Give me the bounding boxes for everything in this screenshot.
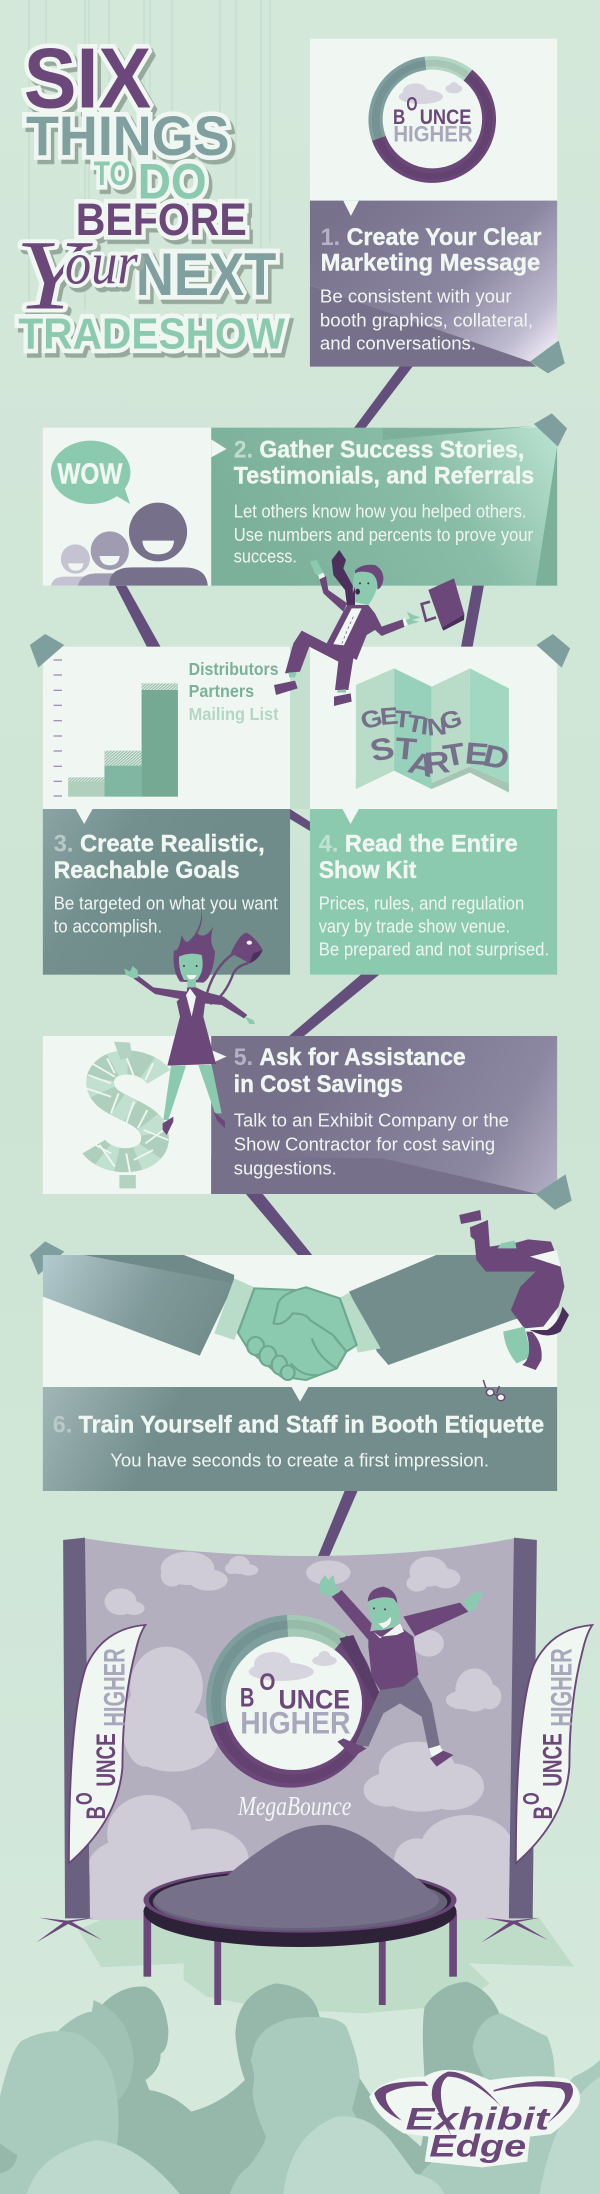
title: six things to do before your next tradeshow: DO <box>138 154 207 209</box>
heading: step 5 <box>234 1043 466 1098</box>
heading: step 1: Marketing Message <box>321 248 540 276</box>
icon: tape corner <box>530 341 565 373</box>
illustration: handshake <box>43 1255 557 1380</box>
feather flag right: HIGHER <box>545 1648 578 1727</box>
logo: bounce higher ring: O <box>406 94 417 115</box>
logo: Exhibit Edge: Exhibit <box>406 2101 551 2137</box>
text: step 1 body <box>320 287 533 354</box>
booth posts <box>63 1538 537 1918</box>
heading: step 5: in Cost Savings <box>234 1070 403 1098</box>
feather flag left <box>69 1625 145 1863</box>
icon: three smiling people <box>51 503 208 586</box>
icon: folded getting started map <box>356 668 513 793</box>
clouds <box>88 1552 513 1920</box>
trampoline <box>143 1825 457 2005</box>
heading: step 1 <box>321 223 541 276</box>
booth backdrop with clouds and logo <box>63 1538 592 1920</box>
chart: axis ticks <box>54 659 62 797</box>
text: step 2 body: Let others know how you helped others. <box>234 502 527 522</box>
title: six things to do before your next tradeshow: NEXT <box>136 240 276 308</box>
feather flag right: O <box>519 1792 544 1805</box>
icon: folded getting started map: GETTING <box>357 703 465 741</box>
icon: wow speech bubble <box>51 441 130 504</box>
icon: tape corner <box>536 1174 572 1210</box>
title: six things to do before your next tradeshow: TO <box>94 154 130 192</box>
heading: step 4 <box>319 829 518 884</box>
logo: Exhibit Edge: Edge <box>429 2129 526 2164</box>
title: six things to do before your next tradeshow <box>15 30 286 358</box>
text: step 1 body: Be consistent with your <box>320 287 512 307</box>
legend: distributors partners mailing list: Mailing List <box>189 704 279 725</box>
feather flag right: UNCE <box>538 1733 568 1787</box>
title: six things to do before your next tradeshow: SIX <box>24 30 151 126</box>
text: step 5 body: Talk to an Exhibit Company or the <box>234 1111 509 1131</box>
feather flag left: HIGHER <box>98 1648 131 1727</box>
panel: step 3 chart area <box>30 634 290 809</box>
logo: large bounce higher ring: UNCE <box>279 1685 350 1715</box>
text: step 2 body: success. <box>234 547 297 567</box>
icon: folded getting started map: STARTED <box>366 730 513 784</box>
text: step 5 body <box>234 1111 509 1179</box>
logo: bounce higher ring: HIGHER <box>393 123 473 147</box>
heading: step 2 <box>234 435 534 489</box>
legend: distributors partners mailing list: Partners <box>189 681 254 702</box>
chart: stacked bars <box>68 683 178 797</box>
text: step 3 body: Be targeted on what you want <box>54 894 278 914</box>
icon: shattered dollar sign <box>86 1042 168 1188</box>
heading: step 1: 1. Create Your Clear <box>321 223 541 251</box>
title: six things to do before your next tradeshow: Y <box>15 220 94 331</box>
title: six things to do before your next tradeshow: BEFORE <box>76 195 247 245</box>
text: step 4 body <box>319 894 549 960</box>
illustration: upside-down falling man and glasses <box>459 1210 569 1401</box>
text: step 1 body: and conversations. <box>320 334 476 354</box>
text: step 1 body: booth graphics, collateral, <box>320 311 533 331</box>
illustration: falling businesswoman <box>124 910 263 1135</box>
logo: Exhibit Edge <box>369 2070 580 2167</box>
trampoline, crowd and footer logo <box>0 1825 600 2194</box>
feather flag left: B <box>82 1806 112 1819</box>
panel: step 4 map area <box>310 634 570 809</box>
text: step 4 body: Be prepared and not surprised. <box>319 940 549 960</box>
title: six things to do before your next tradeshow: TRADESHOW <box>18 308 286 358</box>
booth bases <box>36 1918 548 1942</box>
logo: large bounce higher ring <box>206 1615 376 1788</box>
connector lines between steps <box>115 366 484 1557</box>
title: six things to do before your next tradeshow: our <box>65 229 138 296</box>
heading: step 3: Reachable Goals <box>54 856 240 884</box>
panel: step 2 testimonials <box>43 413 567 586</box>
icon: wow speech bubble: WOW <box>57 457 123 490</box>
text: step 5 body: Show Contractor for cost saving <box>234 1135 495 1155</box>
illustration: falling businessman <box>274 550 464 706</box>
icon: tape corner <box>30 1241 64 1275</box>
logo: bounce higher ring <box>368 56 496 183</box>
feather flag right <box>516 1625 592 1863</box>
logo: large bounce higher ring: O <box>259 1668 276 1696</box>
logo: bounce higher ring: B <box>393 104 405 129</box>
text: step 4 body: vary by trade show venue. <box>319 917 510 937</box>
panel: step 5 cost savings <box>43 1036 572 1210</box>
heading: step 3 <box>54 829 265 884</box>
panel: step 3 text block <box>43 809 290 975</box>
text: step 6 body: You have seconds to create a first impression. <box>110 1451 489 1471</box>
heading: step 3: 3. Create Realistic, <box>54 829 265 857</box>
legend: distributors partners mailing list <box>189 659 279 725</box>
text: step 3 body: to accomplish. <box>54 917 162 937</box>
logo: large bounce higher ring: B <box>240 1683 254 1713</box>
heading: step 2: 2. Gather Success Stories, <box>234 435 524 463</box>
panel: step 6 booth etiquette <box>30 1210 569 1491</box>
panel: step 4 text block <box>310 809 557 975</box>
text: MegaBounce script: MegaBounce <box>237 1792 351 1821</box>
title: six things to do before your next tradeshow: THINGS <box>26 105 230 167</box>
floor shadow under booth <box>78 1900 574 2013</box>
feather flag left: UNCE <box>91 1733 121 1787</box>
text: step 4 body: Prices, rules, and regulation <box>319 894 524 914</box>
heading: step 5: 5. Ask for Assistance <box>234 1043 466 1071</box>
text: step 2 body <box>234 502 533 567</box>
crowd silhouettes <box>0 1982 600 2194</box>
feather flag right: B <box>529 1806 559 1819</box>
feather flag left: O <box>72 1792 97 1805</box>
illustration: jumping man <box>320 1575 483 1767</box>
text: step 5 body: suggestions. <box>234 1159 337 1179</box>
panels: steps 3 and 4 lower part and step 5 <box>43 809 572 1210</box>
legend: distributors partners mailing list: Distributors <box>189 659 279 680</box>
panel: step 1 clear marketing message <box>310 39 565 373</box>
logo: bounce higher ring: UNCE <box>420 104 471 129</box>
heading: step 4: Show Kit <box>319 856 417 884</box>
panels: steps 2, 3 and 4 upper part <box>30 413 570 809</box>
heading: step 4: 4. Read the Entire <box>319 829 518 857</box>
logo: large bounce higher ring: HIGHER <box>240 1705 351 1741</box>
heading: step 2: Testimonials, and Referrals <box>234 461 534 489</box>
text: step 3 body <box>54 894 278 937</box>
